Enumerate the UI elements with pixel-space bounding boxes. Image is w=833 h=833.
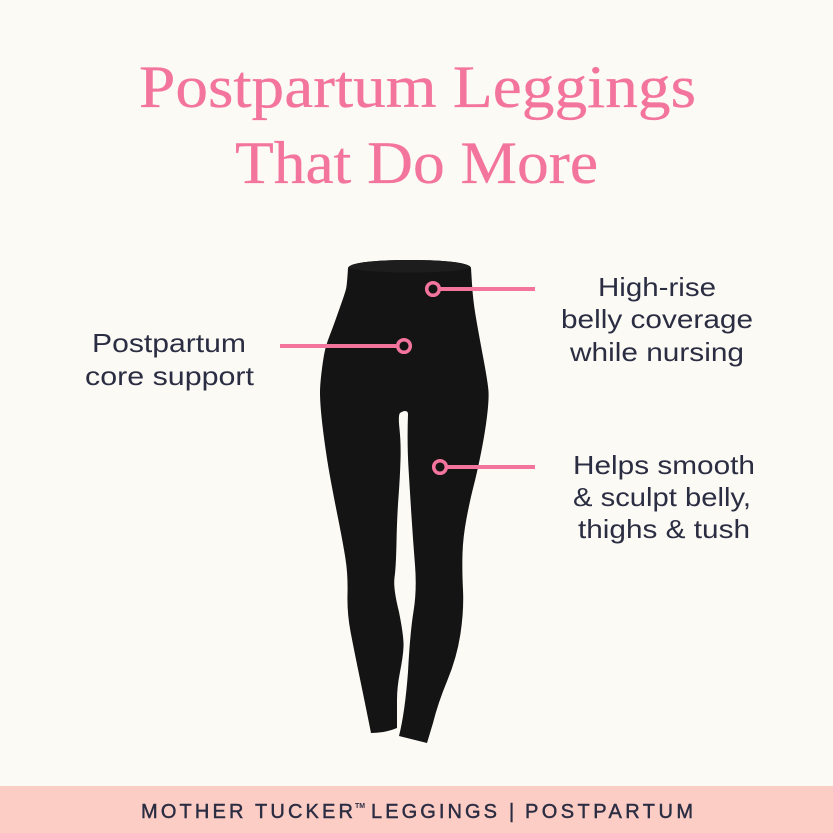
footer text: [141, 801, 693, 823]
footer banner: [0, 786, 833, 833]
callout: core support: [85, 328, 410, 391]
callout: high-rise belly coverage: [427, 272, 753, 367]
text: smooth and sculpt: thighs & tush: [578, 514, 750, 544]
text: high-rise: [561, 272, 753, 367]
title: That Do More: [235, 130, 598, 196]
text: smooth and sculpt: Helps smooth: [573, 450, 755, 480]
text: smooth and sculpt: & sculpt belly,: [573, 482, 751, 512]
footer text: TM: [355, 803, 365, 810]
text: high-rise: belly coverage: [561, 304, 753, 334]
text: core support: Postpartum: [92, 328, 246, 358]
pointer: core support: [280, 340, 410, 352]
leggings illustration: [320, 260, 489, 743]
footer text: LEGGINGS: [371, 801, 497, 823]
footer text: |: [509, 801, 514, 823]
title: [139, 54, 696, 196]
callout: smooth and sculpt: [434, 450, 755, 544]
text: high-rise: while nursing: [569, 337, 744, 367]
text: core support: [85, 328, 255, 391]
title: Postpartum Leggings: [139, 54, 696, 120]
text: core support: core support: [85, 361, 255, 391]
text: smooth and sculpt: [573, 450, 755, 544]
text: high-rise: High-rise: [598, 272, 716, 302]
pointer: high-rise: [427, 283, 535, 295]
pointer: smooth and sculpt: [434, 461, 535, 473]
footer text: POSTPARTUM: [525, 801, 693, 823]
footer text: MOTHER TUCKER: [141, 801, 353, 823]
